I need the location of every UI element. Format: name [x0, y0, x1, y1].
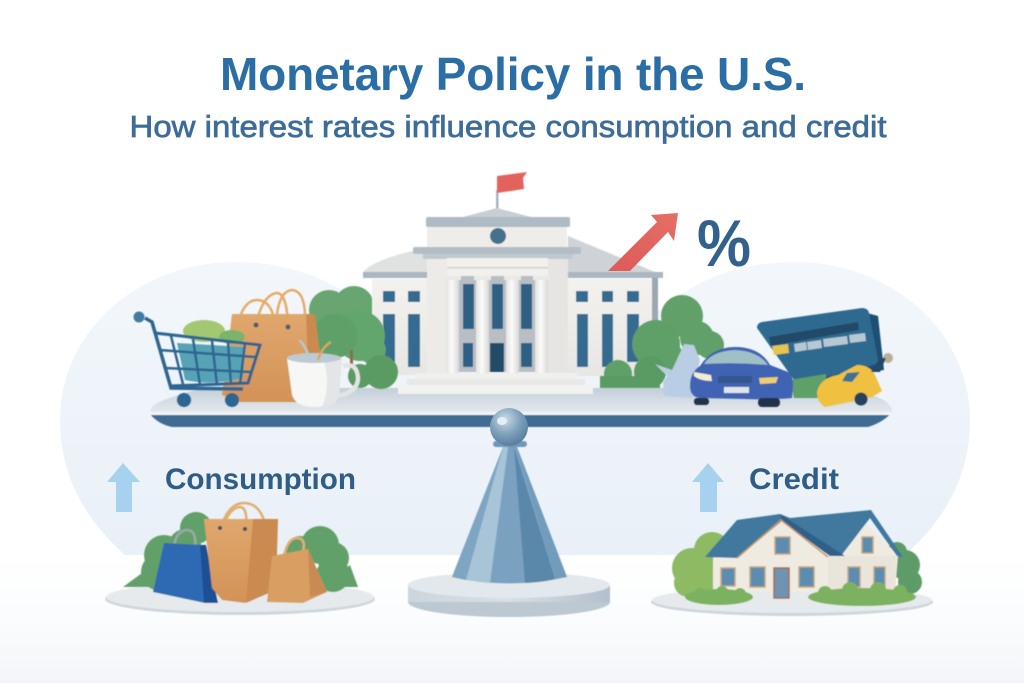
trees in front of building — [313, 311, 684, 389]
columns — [446, 276, 548, 373]
fulcrum cone — [452, 447, 567, 584]
hedges — [685, 582, 916, 606]
balance scale fulcrum — [408, 441, 610, 617]
subtitle: How interest rates influence consumption and credit — [130, 109, 887, 144]
flag — [496, 172, 527, 210]
plate — [651, 588, 933, 616]
credit group on platform — [655, 308, 893, 407]
coffee cup — [287, 341, 358, 407]
windows side — [383, 291, 639, 367]
red upward arrow — [608, 213, 678, 271]
folded blue object — [655, 344, 700, 398]
small tan bag — [267, 538, 327, 603]
clock — [490, 228, 506, 244]
bushes — [123, 512, 358, 592]
bushes — [672, 532, 730, 597]
percent sign: % — [697, 206, 751, 280]
blue bag — [153, 530, 218, 603]
house illustration — [651, 510, 933, 616]
fulcrum base — [408, 572, 610, 617]
windows center — [463, 284, 532, 372]
credit card — [757, 308, 884, 398]
title: Monetary Policy in the U.S. — [220, 48, 806, 100]
trees behind building — [309, 286, 724, 359]
house walls — [713, 516, 898, 592]
steps — [415, 373, 577, 379]
building: central bank — [363, 172, 663, 394]
consumption label: Consumption — [165, 463, 356, 496]
plate — [105, 583, 375, 615]
background blue blob — [0, 262, 1024, 683]
fulcrum ball — [490, 408, 528, 446]
consumption shopping bags illustration — [105, 503, 375, 615]
blue car — [690, 347, 793, 407]
shopping group on platform — [134, 290, 358, 407]
credit label: Credit — [749, 463, 839, 496]
house windows — [721, 537, 885, 587]
scale beam platform — [150, 388, 892, 427]
greens and basket contents — [183, 320, 225, 342]
yellow key-shaped car — [817, 353, 893, 407]
large tan bag — [204, 503, 278, 603]
house door — [774, 568, 789, 598]
shopping bag — [222, 290, 321, 402]
consumption arrow — [107, 463, 140, 512]
fulcrum collar — [493, 441, 527, 447]
roof — [705, 510, 903, 558]
shopping cart — [145, 318, 260, 389]
credit arrow — [692, 463, 724, 512]
